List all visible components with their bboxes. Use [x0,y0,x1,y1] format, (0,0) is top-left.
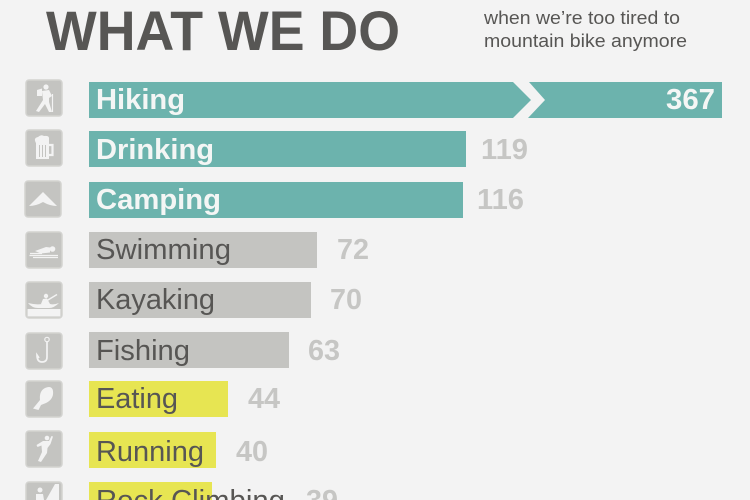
value: 44: 44 [248,383,280,415]
row: hiking [26,80,722,118]
icon: beer mug [26,130,62,166]
bar: running [89,432,216,468]
icon: runner [26,431,62,467]
label: fishing: Fishing [96,335,190,367]
label: running: Running [96,436,204,468]
subtitle [483,7,687,51]
value: 72: 72 [337,234,369,266]
row: drinking [26,130,528,167]
title: WHAT WE DO [46,0,400,62]
value: 119: 119 [481,134,528,166]
row: camping [25,181,524,218]
row: running [26,431,268,468]
bar: drinking [89,131,466,167]
label: hiking: Hiking [96,84,185,116]
value: 116: 116 [477,184,524,216]
value: 63: 63 [308,335,340,367]
row: rock climbing [26,482,338,500]
icon: hiker [26,80,62,116]
bar: kayaking [89,282,311,318]
row: fishing [26,332,340,369]
row: eating [26,381,280,417]
icon: kayak [26,282,62,318]
icon: tent [25,181,61,217]
bar: eating [89,381,228,417]
icon: drumstick [26,381,62,417]
label: drinking: Drinking [96,134,214,166]
label: kayaking: Kayaking [96,284,215,316]
bar: swimming [89,232,317,268]
icon: climber [26,482,62,500]
subtitle: mountain bike anymore [484,30,687,51]
value: 367: 367 [666,84,715,116]
bar: fishing [89,332,289,368]
bar: hiking [89,82,722,118]
value: 40: 40 [236,436,268,468]
icon: swimmer [26,232,62,268]
row: kayaking [26,282,362,318]
subtitle: when we’re too tired to [483,7,680,28]
icon: fish hook [26,333,62,369]
label: camping: Camping [96,184,221,216]
value: 70: 70 [330,284,362,316]
bar: rock climbing [89,482,212,500]
label: eating: Eating [96,383,178,415]
bar: camping [89,182,463,218]
row: swimming [26,232,369,268]
label: swimming: Swimming [96,234,231,266]
